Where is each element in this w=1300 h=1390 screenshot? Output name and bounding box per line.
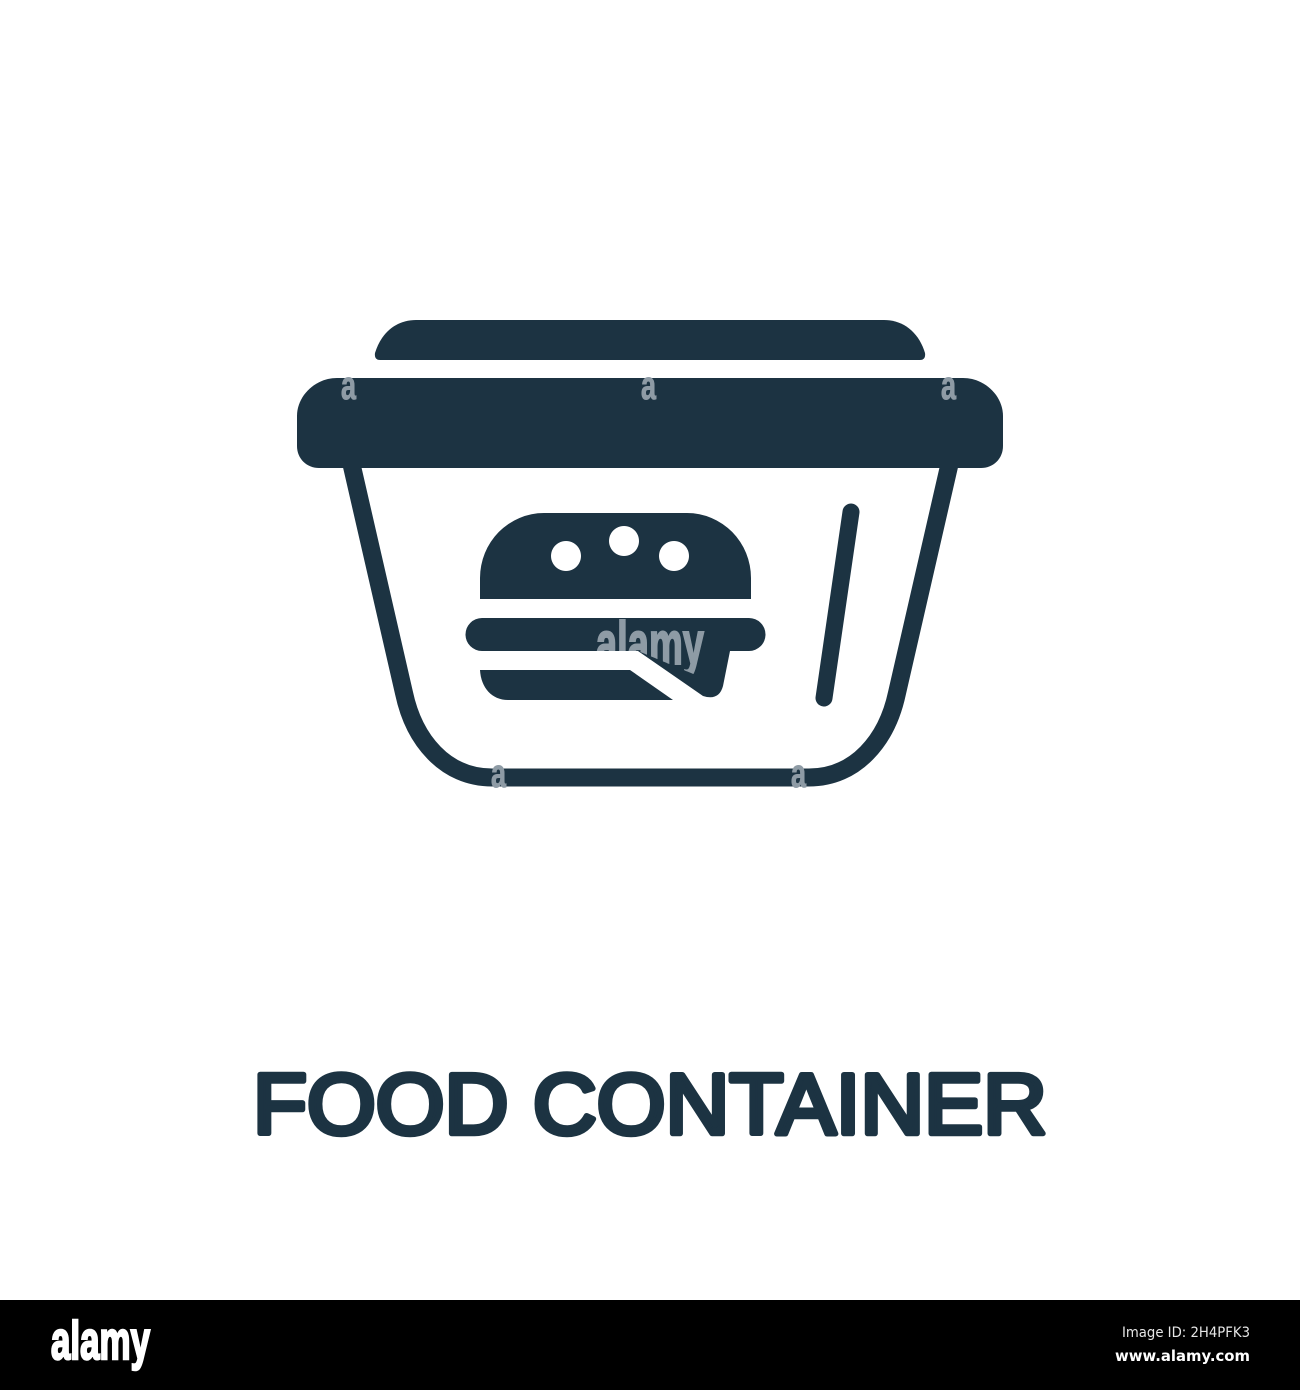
- bottom bun: [480, 670, 673, 700]
- lid rim: [297, 378, 1003, 468]
- title: FOOD CONTAINER: [253, 1058, 1047, 1152]
- icon: food container: [297, 320, 1003, 778]
- top bun with sesame seeds: [480, 513, 751, 599]
- footer logo: alamy: [51, 1311, 150, 1371]
- website: www.alamy.com: [1115, 1347, 1250, 1365]
- watermark: small marks on the icon: a: [641, 364, 657, 408]
- glass reflection line: [824, 512, 851, 698]
- container body outline: [351, 462, 950, 778]
- upper lid: [375, 320, 925, 360]
- watermark: alamy on burger: alamy: [596, 610, 704, 677]
- footer bar: [0, 1300, 1300, 1390]
- infographic canvas: [0, 320, 1300, 1390]
- watermark: small marks on the icon: a: [341, 364, 357, 408]
- watermark: small marks on the icon: a: [491, 752, 507, 796]
- watermark: small marks on the icon: a: [941, 364, 957, 408]
- watermark: small marks on the icon: [341, 364, 957, 796]
- icon: burger: [466, 513, 766, 700]
- image id: Image ID: 2H4PFK3: [1122, 1324, 1250, 1341]
- watermark: small marks on the icon: a: [791, 752, 807, 796]
- burger patty with drip: [466, 618, 766, 697]
